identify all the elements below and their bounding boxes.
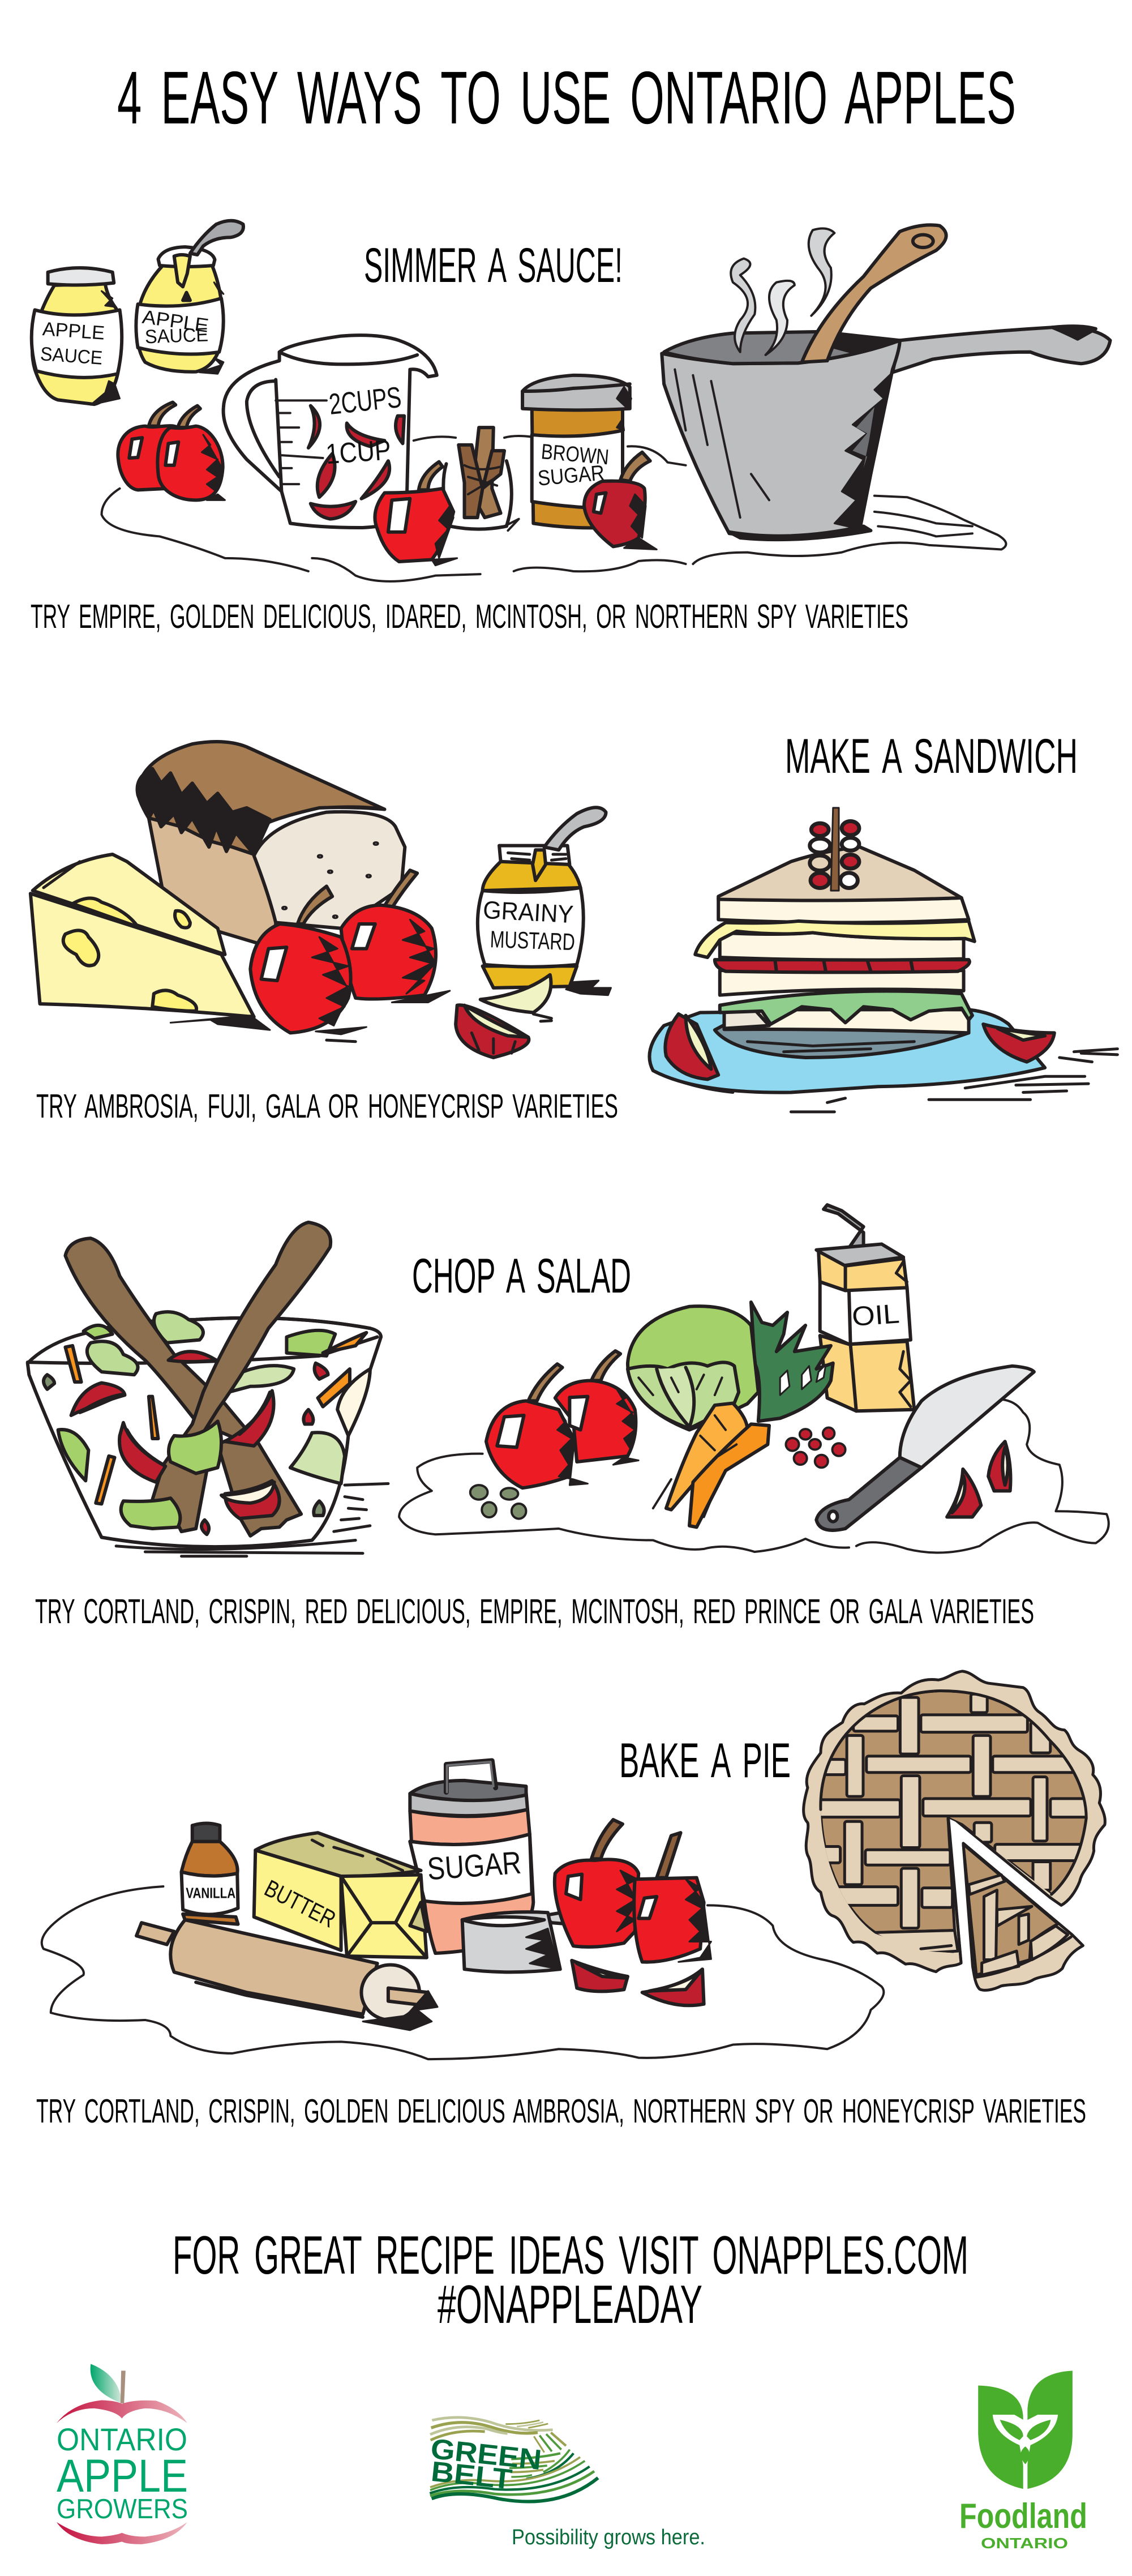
icon: vanilla bottle [182, 1824, 238, 1924]
icon: brown sugar jar [522, 375, 631, 528]
logo: foodland ontario [959, 2370, 1087, 2552]
call to action: hashtag: #ONAPPLEADAY [438, 2274, 702, 2335]
icon: grainy mustard jar: MUSTARD [490, 926, 576, 955]
pie slice [963, 1843, 1083, 1990]
section: salad illustration [28, 1205, 1109, 1556]
logo: ontario apple growers: ONTARIO [57, 2421, 187, 2457]
pie filling and lattice [818, 1691, 1087, 1958]
icon: oil bottle: OIL [851, 1299, 901, 1332]
table outline [42, 1886, 884, 2059]
icon: sandwich on blue plate [649, 808, 1117, 1112]
sandwich pick with apple slices [810, 808, 859, 891]
pie outline [821, 1691, 1086, 1963]
icon: brown sugar jar: SUGAR [537, 461, 606, 491]
icon: two red apples [118, 403, 225, 500]
text: sandwich varieties: TRY AMBROSIA, FUJI, GALA OR HONEYCRISP VARIETIES [36, 1088, 618, 1125]
icon: measuring jug: 2CUPS [328, 381, 403, 421]
logo: greenbelt [429, 2417, 598, 2502]
icon: carrots [653, 1403, 769, 1527]
icon: salad bowl [28, 1222, 388, 1556]
icon: pot with spoon and steam [662, 225, 1110, 540]
logo: ontario apple growers: APPLE [57, 2450, 188, 2502]
icon: grainy mustard jar [478, 807, 611, 995]
icon: oil bottle [816, 1205, 914, 1411]
icon: apple slices [947, 1441, 1011, 1517]
icon: butter block: BUTTER [260, 1875, 340, 1933]
icon: measuring cup [462, 1909, 589, 1972]
icon: measuring jug: 1CUP [325, 434, 392, 470]
table outline [101, 436, 1006, 581]
icon: right dark apple [584, 452, 657, 550]
icon: brown sugar jar: BROWN [540, 440, 610, 469]
logo: foodland ontario: ONTARIO [981, 2535, 1068, 2552]
icon: red apples [555, 1820, 711, 1962]
icon: bread loaf [138, 742, 405, 949]
icon: front centre apple [375, 462, 457, 566]
icon: apple sauce jar right with spoon: APPLE [141, 306, 210, 337]
icon: lattice pie [804, 1671, 1105, 1990]
section: simmer a sauce illustration [32, 221, 1110, 581]
logo: ontario apple growers [57, 2364, 188, 2544]
icon: apple sauce jar left [32, 268, 122, 405]
icon: butter block [254, 1833, 427, 1958]
greenbelt wordmark [429, 2433, 543, 2496]
icon: carrot greens [751, 1302, 833, 1421]
spoons [65, 1238, 301, 1520]
icon: two red apples [250, 870, 450, 1042]
text: greenbelt tagline: Possibility grows here. [512, 2526, 705, 2549]
heading: chop a salad: CHOP A SALAD [412, 1249, 631, 1303]
icon: grainy mustard jar: GRAINY [482, 896, 574, 928]
icon: cheese wedge [31, 854, 270, 1030]
icon: apple sauce jar left: APPLE [42, 318, 105, 344]
icon: sugar canister [410, 1761, 533, 1953]
heading: bake a pie: BAKE A PIE [619, 1734, 791, 1788]
icon: apple sauce jar left: SAUCE [40, 343, 103, 369]
section: pie ingredients illustration [42, 1761, 884, 2059]
pie crust [804, 1671, 1105, 1972]
wave stripes [430, 2417, 598, 2502]
icon: apple slices [572, 1961, 704, 2005]
greenbelt wordmark: GREEN [429, 2433, 543, 2476]
icon: apple sauce jar right with spoon [136, 221, 243, 374]
heading: simmer a sauce: SIMMER A SAUCE! [364, 238, 623, 293]
icon: vanilla bottle: VANILLA [186, 1885, 235, 1902]
icon: lettuce [628, 1306, 758, 1430]
icon: rolling pin [136, 1920, 438, 2030]
icon: knife [816, 1366, 1034, 1530]
icon: apple slices [456, 975, 551, 1058]
icon: measuring jug [224, 335, 437, 528]
logo: ontario apple growers: GROWERS [57, 2494, 188, 2524]
leaves [154, 1312, 203, 1343]
icon: sugar canister: SUGAR [426, 1845, 522, 1886]
icon: berries and seeds [470, 1428, 846, 1519]
icon: cinnamon sticks in glass [443, 427, 519, 530]
icon: red apples [486, 1351, 638, 1488]
greenbelt wordmark: BELT [430, 2455, 513, 2496]
icon: apple sauce jar right with spoon: SAUCE [144, 324, 209, 348]
logo: foodland ontario: Foodland [959, 2497, 1087, 2536]
table outline [399, 1400, 1109, 1552]
section: sandwich illustration left [31, 742, 1117, 1112]
